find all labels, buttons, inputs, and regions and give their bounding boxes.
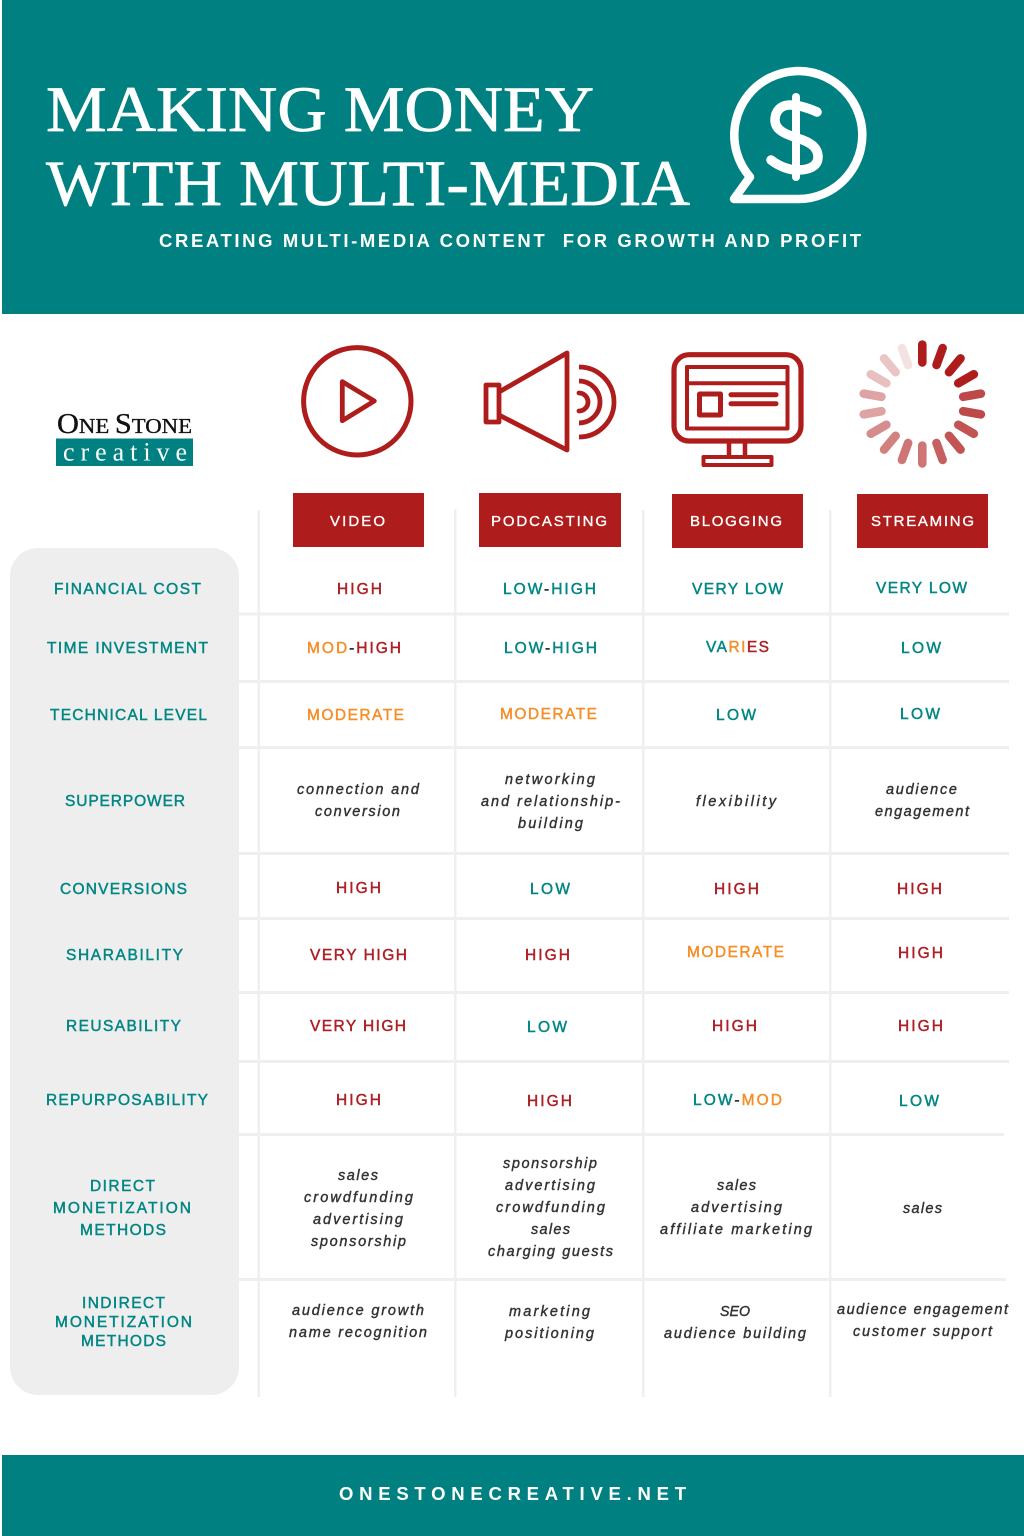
column: podcasting: sponsorship [503,1156,597,1172]
column: blogging: advertising [691,1200,782,1216]
column: podcasting: networking [505,772,595,788]
column: podcasting: HIGH [525,947,570,964]
header: podcasting: PODCASTING [491,513,607,530]
logo: One Stone Creative [56,409,193,466]
icon: streaming loading spinner [864,344,981,464]
column: podcasting: MODERATE [500,706,597,723]
column: video: MOD-HIGH [307,640,401,657]
column: podcasting: HIGH [527,1093,572,1110]
column: video: VERY HIGH [310,1018,406,1035]
column: podcasting: advertising [505,1178,595,1194]
icon: dollar speech bubble [734,71,862,199]
header banner [2,0,1024,314]
column: podcasting: LOW [530,881,570,898]
column: streaming: LOW [901,640,941,657]
row labels: MONETIZATION [53,1200,191,1217]
column: video: MODERATE [307,707,404,724]
column: streaming: audience engagement [837,1302,1009,1318]
column: podcasting [481,581,620,1342]
column: video: conversion [315,804,400,820]
column: blogging: SEO [720,1304,750,1320]
footer banner [2,1455,1024,1536]
column: podcasting: LOW [527,1019,567,1036]
column: blogging: sales [717,1178,756,1194]
column: podcasting: building [518,816,583,832]
column headers [293,493,988,548]
icon: video play button [304,348,411,455]
column: blogging: MODERATE [687,944,784,961]
column: video: crowdfunding [304,1190,413,1206]
column: podcasting: sales [531,1222,570,1238]
header: streaming [857,494,988,548]
logo: One Stone Creative: creative [63,438,187,466]
row labels: DIRECT [90,1178,156,1195]
column: video [289,581,427,1341]
row labels: SUPERPOWER [65,793,185,810]
table grid [239,509,1009,1397]
column: blogging: audience building [664,1326,806,1342]
header: blogging [672,494,803,548]
row labels: FINANCIAL COST [54,581,202,598]
column: streaming: engagement [875,804,970,820]
column: video: sales [338,1168,378,1184]
column: video: HIGH [336,880,381,897]
column: podcasting: marketing [509,1304,590,1320]
row labels: INDIRECT [82,1295,166,1312]
column: video: VERY HIGH [310,947,407,964]
column: streaming: LOW [900,706,940,723]
title [46,74,690,220]
header: blogging: BLOGGING [690,513,782,530]
column: streaming: customer support [853,1324,993,1340]
column: video: HIGH [337,581,382,598]
header: streaming: STREAMING [871,513,974,530]
column: blogging: VARIES [706,639,769,656]
row labels: MONETIZATION [55,1314,192,1331]
column: streaming: LOW [899,1093,939,1110]
icon: blogging monitor [674,355,801,465]
column: podcasting: positioning [504,1326,594,1342]
column: blogging [660,581,812,1342]
logo: One Stone Creative: ONE STONE [57,409,192,440]
column: streaming: HIGH [898,1018,943,1035]
column: podcasting: charging guests [488,1244,613,1260]
column: video: advertising [313,1212,403,1228]
column: blogging: flexibility [696,794,777,810]
column: podcasting: LOW-HIGH [503,581,596,598]
column: podcasting: crowdfunding [496,1200,605,1216]
column: video: audience growth [292,1303,424,1319]
column: video: connection and [297,782,420,798]
title: MAKING MONEY [46,74,594,146]
title: WITH MULTI-MEDIA [46,148,690,220]
column: video: sponsorship [311,1234,406,1250]
row labels: METHODS [81,1333,166,1350]
row labels: METHODS [80,1222,166,1239]
column: streaming: sales [903,1201,942,1217]
column: blogging: HIGH [712,1018,757,1035]
column: streaming: HIGH [897,881,942,898]
column: blogging: affiliate marketing [660,1222,812,1238]
column: blogging: LOW [716,707,756,724]
row labels: REUSABILITY [66,1018,181,1035]
row labels: SHARABILITY [66,947,183,964]
subtitle: CREATING MULTI-MEDIA CONTENT FOR GROWTH AND PROFIT [159,230,862,251]
header: video [293,493,424,547]
row labels: TECHNICAL LEVEL [50,707,207,724]
column: streaming: VERY LOW [876,580,967,597]
column: streaming: HIGH [898,945,943,962]
column: blogging: LOW-MOD [693,1092,782,1109]
column: streaming: audience [886,782,957,798]
panel: row label background [10,548,239,1395]
footer website: ONESTONECREATIVE.NET [339,1483,687,1504]
column: podcasting: LOW-HIGH [504,640,597,657]
column: blogging: VERY LOW [692,581,783,598]
column: video: name recognition [289,1325,427,1341]
row labels: CONVERSIONS [60,881,187,898]
row labels [46,581,209,1350]
row labels: REPURPOSABILITY [46,1092,208,1109]
column: podcasting: and relationship- [481,794,620,810]
header: podcasting [479,493,621,547]
column: streaming [837,580,1009,1340]
row labels: TIME INVESTMENT [47,640,209,657]
column: blogging: HIGH [714,881,759,898]
header: video: VIDEO [330,513,385,530]
icon: podcasting speaker [486,353,614,450]
column: video: HIGH [336,1092,381,1109]
